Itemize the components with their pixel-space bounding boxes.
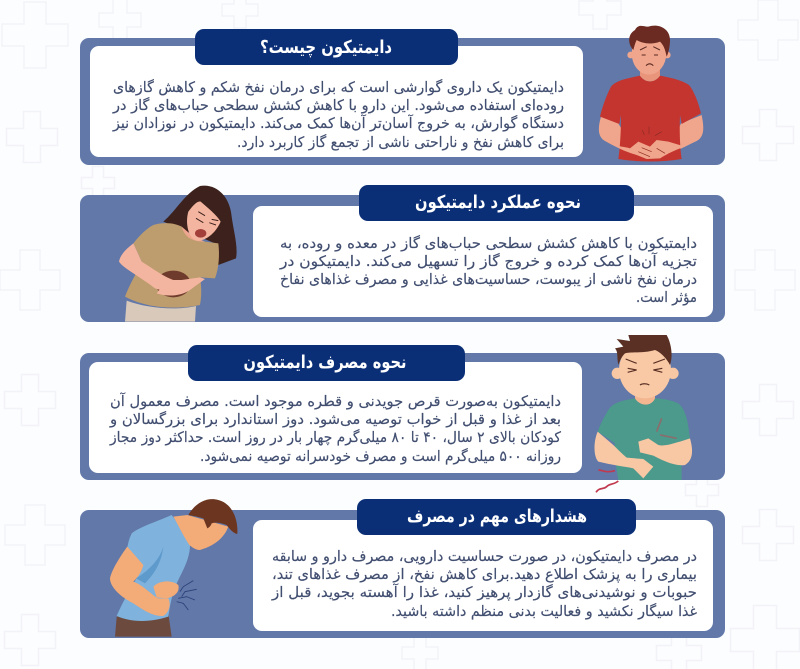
body text: دستگاه گوارش، به خروج آسان‌تر آن‌ها کمک می‌کند. دایمتیکون در نوزادان نیز <box>112 114 564 133</box>
body text: بیماری را به پزشک اطلاع دهید.برای کاهش نفخ، از مصرف غذاهای تند، <box>272 567 697 583</box>
text card <box>90 46 583 157</box>
illustration: woman with stomach pain <box>119 186 237 322</box>
body text: برای کاهش نفخ و ناراحتی ناشی از تجمع گاز کاربرد دارد. <box>237 134 564 151</box>
heading: warnings: هشدارهای مهم در مصرف <box>407 506 587 527</box>
body text: مؤثر است. <box>636 290 697 306</box>
body text: کودکان بالای ۲ سال، ۴۰ تا ۸۰ میلی‌گرم چهار بار در روز است. حداکثر دوز مجاز <box>109 429 561 446</box>
heading: what is dimethicone <box>195 29 458 65</box>
illustration: boy in green shirt with stomach ache <box>594 335 692 492</box>
heading: warnings <box>357 499 636 535</box>
body text <box>109 392 561 465</box>
text card <box>89 362 582 473</box>
heading: what is dimethicone: دایمتیکون چیست؟ <box>260 37 392 58</box>
text card <box>253 520 713 631</box>
heading: how to use <box>188 345 465 381</box>
illustration: man in red shirt holding stomach <box>599 26 703 161</box>
heading: how it works: نحوه عملکرد دایمتیکون <box>415 192 581 213</box>
heading: how it works <box>359 185 634 221</box>
body text <box>112 79 564 151</box>
body text <box>279 235 697 306</box>
body text: بعد از غذا و قبل از خواب توصیه می‌شود. دوز استاندارد برای بزرگسالان و <box>109 411 561 428</box>
body text: در مصرف دایمتیکون، در صورت حساسیت دارویی، مصرف دارو و سابقه <box>272 549 697 565</box>
text card <box>253 206 713 317</box>
panel: how to use dimethicone <box>80 335 725 492</box>
body text <box>271 549 697 620</box>
panel: how dimethicone works <box>80 185 725 322</box>
body text: درمان نفخ ناشی از یبوست، حساسیت‌های غذایی و مصرف غذاهای نفاخ <box>280 272 697 288</box>
body text: دایمتیکون با کاهش کشش سطحی حباب‌های گاز در معده و روده، به <box>280 235 697 252</box>
body text: حبوبات و نوشیدنی‌های گازدار پرهیز کنید، غذا را آهسته بجوید، قبل از <box>271 583 697 601</box>
body text: روده‌ای استفاده می‌شود. این دارو با کاهش کشش سطحی حباب‌های گاز در <box>112 97 564 114</box>
body text: غذا سیگار نکشید و فعالیت بدنی منظم داشته باشید. <box>391 603 697 620</box>
panel: important warnings <box>80 499 725 638</box>
heading: how to use: نحوه مصرف دایمتیکون <box>244 352 406 373</box>
illustration: man bending with stomach pain <box>110 499 237 637</box>
body text: دایمتیکون به‌صورت قرص جویدنی و قطره موجود است. مصرف معمول آن <box>110 392 561 410</box>
body text: دایمتیکون یک داروی گوارشی است که برای درمان نفخ شکم و کاهش گازهای <box>113 79 564 96</box>
panel: what is dimethicone <box>80 26 725 165</box>
body text: تجزیه آن‌ها کمک کرده و خروج گاز را تسهیل می‌کند. دایمتیکون در <box>279 252 697 271</box>
body text: روزانه ۵۰۰ میلی‌گرم است و مصرف خودسرانه توصیه نمی‌شود. <box>200 448 561 465</box>
